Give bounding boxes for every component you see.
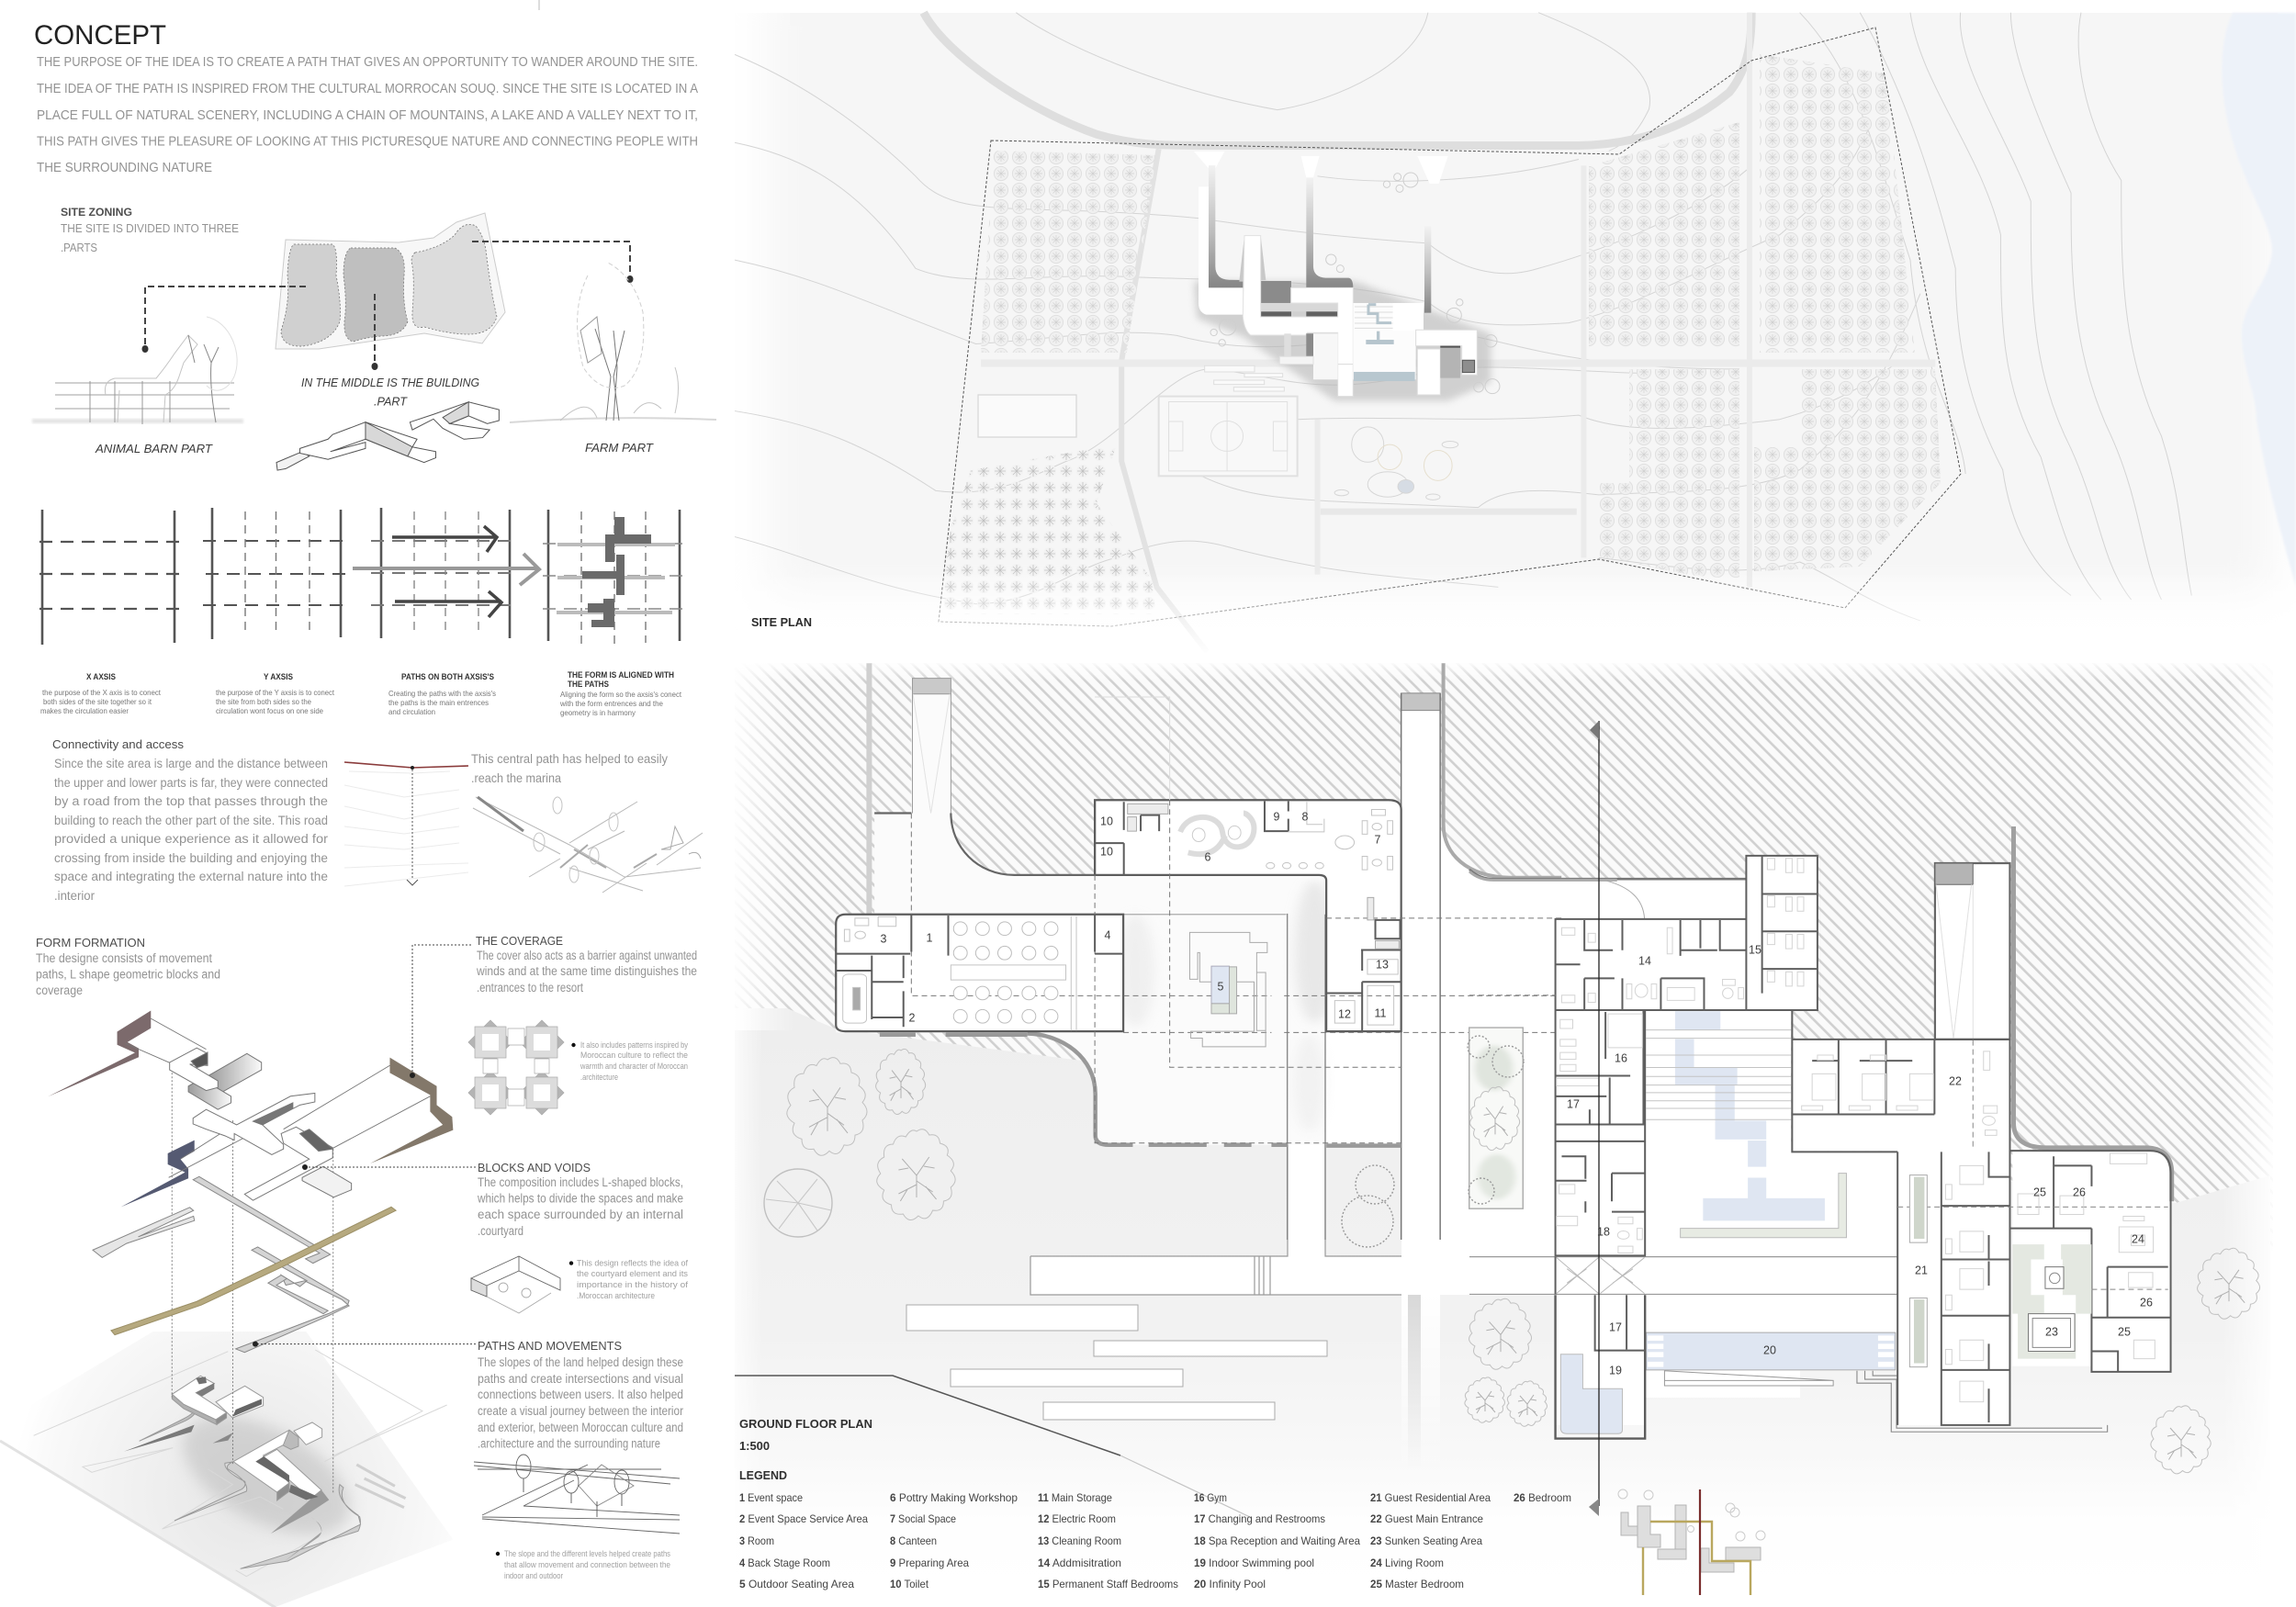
- panel: site zoning: [32, 206, 716, 470]
- paths text: The slopes of the land helped design these: [478, 1355, 683, 1369]
- axis descriptions: circulation wont focus on one side: [216, 706, 323, 715]
- zoning text: THE SITE IS DIVIDED INTO THREE: [61, 222, 239, 235]
- axis captions: [86, 670, 674, 689]
- courtyard note: .Moroccan architecture: [577, 1291, 655, 1301]
- path perspective sketch: [474, 1455, 680, 1534]
- coverage note: It also includes patterns inspired by: [580, 1040, 688, 1051]
- diagram: y axis: [203, 508, 347, 639]
- axonometric base: ground floor massing: [0, 1332, 453, 1607]
- blocks text: .courtyard: [478, 1224, 523, 1238]
- coverage text: [476, 949, 697, 995]
- coverage text: .entrances to the resort: [477, 981, 583, 995]
- axis descriptions: Aligning the form so the axsis's conect: [560, 690, 682, 699]
- outdoor seating courtyard: [1189, 932, 1267, 1047]
- room numbers: 20: [1763, 1343, 1776, 1356]
- legend: 14 Addmisitration: [1038, 1556, 1121, 1569]
- coverage note: warmth and character of Moroccan: [580, 1062, 688, 1072]
- exploded axonometric diagram: [48, 1010, 453, 1494]
- barn rectangle: [978, 395, 1076, 437]
- room numbers: 5: [1218, 980, 1224, 993]
- garden planter: [1469, 1028, 1523, 1208]
- pale floating slabs: [93, 1208, 195, 1257]
- legend: 22 Guest Main Entrance: [1370, 1512, 1483, 1525]
- legend: 5 Outdoor Seating Area: [739, 1578, 854, 1590]
- form formation heading: FORM FORMATION: [36, 936, 145, 950]
- blocks text: [477, 1175, 683, 1238]
- room numbers: 10: [1100, 815, 1113, 827]
- dashed grid continuation: [1469, 995, 2168, 1289]
- axis descriptions: geometry is in harmony: [560, 708, 636, 717]
- building roof plan with shadows: [1194, 152, 1500, 401]
- khaki coverage wall: [370, 1058, 453, 1163]
- event hall tables: [953, 922, 1058, 1023]
- connectivity paragraph: provided a unique experience as it allowed for: [54, 832, 329, 846]
- gray movement paths: [193, 1176, 349, 1353]
- room numbers: 7: [1375, 833, 1381, 846]
- axis descriptions: and circulation: [388, 707, 435, 716]
- heading: ground floor plan: [739, 1417, 872, 1453]
- legend: 8 Canteen: [890, 1534, 937, 1547]
- axis descriptions: [40, 688, 682, 717]
- paths text: and exterior, between Moroccan culture and: [478, 1421, 683, 1434]
- leader dots: [141, 275, 634, 370]
- label: building part: .PART: [374, 395, 408, 408]
- room numbers: [881, 810, 2153, 1377]
- paths note: that allow movement and connection between the: [504, 1560, 670, 1570]
- room numbers: 10: [1100, 845, 1113, 858]
- concept paragraph: THE PURPOSE OF THE IDEA IS TO CREATE A PATH THAT GIVES AN OPPORTUNITY TO WANDER AROUND THE SITE.: [37, 55, 698, 70]
- room numbers: 24: [2132, 1232, 2144, 1245]
- heading: paths and movements: PATHS AND MOVEMENTS: [478, 1339, 622, 1353]
- legend: 12 Electric Room: [1038, 1512, 1116, 1525]
- connectivity heading: Connectivity and access: [52, 737, 185, 751]
- golden path: [111, 1207, 396, 1335]
- axis descriptions: both sides of the site together so it: [43, 697, 152, 706]
- central path caption: This central path has helped to easily: [471, 752, 668, 766]
- label: building part: IN THE MIDDLE IS THE BUILDING: [301, 376, 479, 389]
- axis descriptions: the site from both sides so the: [216, 697, 311, 706]
- zoning text: [61, 222, 239, 254]
- legend: 6 Pottry Making Workshop: [890, 1491, 1018, 1504]
- connectivity paragraph: crossing from inside the building and enjoying the: [54, 851, 328, 865]
- concept paragraph: THE IDEA OF THE PATH IS INSPIRED FROM THE CULTURAL MORROCAN SOUQ. SINCE THE SITE IS LOCATED IN A: [37, 82, 698, 96]
- paths text: .architecture and the surrounding nature: [478, 1436, 660, 1451]
- room numbers: 25: [2033, 1186, 2046, 1198]
- room numbers: 17: [1609, 1320, 1622, 1333]
- legend: 23 Sunken Seating Area: [1370, 1534, 1482, 1547]
- concept paragraph: PLACE FULL OF NATURAL SCENERY, INCLUDING A CHAIN OF MOUNTAINS, A LAKE AND A VALLEY NEXT TO IT,: [37, 108, 698, 123]
- axis descriptions: the paths is the main entrences: [388, 698, 489, 707]
- panel: ground floor plan: [726, 661, 2282, 1596]
- courtyard note: importance in the history of: [577, 1280, 688, 1290]
- key plan diagram: [1618, 1489, 1765, 1595]
- massing sketch: [276, 402, 499, 470]
- site plan bottom fade: [735, 569, 2296, 657]
- diagram: form aligned with paths: [543, 510, 688, 648]
- concept paragraph: THE SURROUNDING NATURE: [37, 161, 212, 175]
- room numbers: 23: [2045, 1325, 2058, 1338]
- axis captions: Y AXSIS: [264, 672, 293, 681]
- east wing: administration, spa and pools: [1469, 826, 2172, 1439]
- projection lines: [172, 1065, 333, 1494]
- blocks text: The composition includes L-shaped blocks,: [478, 1175, 683, 1189]
- panel: site plan: [735, 0, 2296, 657]
- heading: blocks and voids: BLOCKS AND VOIDS: [478, 1161, 591, 1174]
- form formation text: coverage: [36, 983, 83, 997]
- panel: axis diagrams: [39, 508, 688, 717]
- label: building part: [301, 376, 479, 408]
- textured ground: [735, 1008, 2270, 1593]
- hatch edge fades: [726, 661, 2282, 1596]
- panel: form formation: [0, 934, 697, 1607]
- legend: 10 Toilet: [890, 1578, 929, 1590]
- axis captions: X AXSIS: [86, 672, 116, 681]
- tree orchard grids: [940, 54, 1941, 614]
- room numbers: 4: [1105, 928, 1111, 941]
- courtyard note: [569, 1258, 688, 1301]
- guest corridor planters: [1909, 1175, 1927, 1367]
- contour lines: [735, 13, 2191, 621]
- sketch: farm tree: [510, 262, 716, 422]
- trees on ground: [764, 1036, 2260, 1474]
- legend: 2 Event Space Service Area: [739, 1512, 868, 1525]
- connectivity paragraph: by a road from the top that passes through the: [54, 794, 328, 808]
- connectivity paragraph: .interior: [54, 889, 95, 903]
- blocks text: which helps to divide the spaces and make: [477, 1192, 683, 1205]
- sketch: animal barn: [32, 317, 243, 424]
- central path caption: [471, 752, 668, 785]
- room numbers: 11: [1375, 1006, 1387, 1019]
- room numbers: 1: [927, 931, 933, 944]
- legend: 16 Gym: [1194, 1491, 1227, 1504]
- room numbers: 16: [1615, 1051, 1627, 1064]
- zoning leaders: [145, 242, 630, 363]
- walls: [1556, 856, 2171, 1425]
- courtyard note: the courtyard element and its: [577, 1269, 688, 1279]
- courtyard note: This design reflects the idea of: [577, 1258, 688, 1269]
- legend: 21 Guest Residential Area: [1370, 1491, 1491, 1504]
- room numbers: 21: [1915, 1264, 1928, 1276]
- paths text: paths and create intersections and visual: [478, 1372, 683, 1386]
- football pitch: [1159, 397, 1298, 476]
- pottery workshop spiral benches: [1180, 814, 1254, 854]
- legend: 20 Infinity Pool: [1194, 1578, 1266, 1590]
- paths note: indoor and outdoor: [504, 1571, 563, 1581]
- zoning map: [276, 213, 505, 349]
- site plan background wash: [790, 13, 2243, 568]
- heading: ground floor plan: 1:500: [739, 1439, 770, 1453]
- leader: coverage: [410, 945, 471, 1078]
- coverage note: Moroccan culture to reflect the: [580, 1051, 688, 1061]
- zoning text: .PARTS: [61, 242, 97, 254]
- room numbers: 26: [2073, 1186, 2086, 1198]
- section line and arrows: [1589, 721, 1599, 1516]
- navy coverage wall: [121, 1141, 195, 1207]
- diagram: x axis: [39, 510, 180, 645]
- legend: 25 Master Bedroom: [1370, 1578, 1464, 1590]
- central path caption: .reach the marina: [471, 771, 561, 785]
- coverage slab lines: [126, 1018, 430, 1177]
- coverage note: .architecture: [580, 1073, 618, 1083]
- connectivity paragraph: the upper and lower parts is far, they were connected: [54, 776, 328, 790]
- furniture linework: [1557, 859, 2155, 1402]
- room numbers: 19: [1609, 1364, 1622, 1377]
- paths note: The slope and the different levels helped create paths: [504, 1549, 670, 1559]
- form formation text: paths, L shape geometric blocks and: [36, 968, 220, 981]
- coverage text: winds and at the same time distinguishes the: [476, 964, 697, 978]
- label: animal barn part: ANIMAL BARN PART: [95, 443, 213, 455]
- legend: 11 Main Storage: [1038, 1491, 1112, 1504]
- room numbers: 2: [909, 1011, 916, 1024]
- room numbers: 26: [2140, 1296, 2153, 1309]
- site edge line: [735, 1376, 1252, 1518]
- panel: connectivity and access: [52, 737, 703, 903]
- zoning heading: SITE ZONING: [61, 206, 132, 219]
- moroccan tile pattern: [468, 1020, 564, 1115]
- room numbers: 9: [1274, 810, 1280, 823]
- axis descriptions: with the form entrences and the: [559, 699, 663, 708]
- legend: [739, 1468, 1571, 1590]
- label: farm part: FARM PART: [585, 442, 654, 455]
- heading: the coverage: THE COVERAGE: [476, 934, 563, 948]
- room numbers: 14: [1638, 954, 1651, 967]
- form formation text: [36, 951, 220, 997]
- room numbers: 15: [1749, 943, 1761, 956]
- landscaped garden blobs: [1334, 427, 1458, 500]
- room numbers: 17: [1567, 1097, 1580, 1110]
- coverage note: [571, 1040, 688, 1083]
- connectivity paragraph: Since the site area is large and the distance between: [54, 757, 328, 770]
- legend: LEGEND: [739, 1468, 787, 1482]
- coverage text: The cover also acts as a barrier against unwanted: [477, 949, 697, 962]
- concept paragraph: THIS PATH GIVES THE PLEASURE OF LOOKING AT THIS PICTURESQUE NATURE AND CONNECTING PEOPLE WITH: [37, 134, 698, 149]
- panel: concept: [34, 0, 698, 175]
- west wing: event hall and workshop: [836, 663, 1561, 1240]
- room numbers: 12: [1338, 1007, 1351, 1020]
- legend: 4 Back Stage Room: [739, 1556, 830, 1569]
- legend: 15 Permanent Staff Bedrooms: [1038, 1578, 1178, 1590]
- heading: ground floor plan: GROUND FLOOR PLAN: [739, 1417, 872, 1431]
- leader: paths: [253, 1342, 476, 1347]
- axis descriptions: the purpose of the X axis is to conect: [42, 688, 162, 697]
- legend: 18 Spa Reception and Waiting Area: [1194, 1534, 1360, 1547]
- site boundary: [939, 28, 1961, 626]
- bottom terrace bars: [906, 1305, 1327, 1420]
- brown coverage wall: [48, 1010, 151, 1096]
- heading: site plan: SITE PLAN: [751, 615, 812, 629]
- axis descriptions: the purpose of the Y axsis is to conect: [216, 688, 335, 697]
- axis captions: THE PATHS: [568, 680, 609, 689]
- top tier blocks: [170, 1048, 352, 1200]
- legend: 19 Indoor Swimming pool: [1194, 1556, 1314, 1569]
- room numbers: 25: [2118, 1325, 2131, 1338]
- room numbers: 8: [1302, 810, 1309, 823]
- legend: 26 Bedroom: [1514, 1491, 1571, 1504]
- band edge lines with steps: [1030, 1010, 1401, 1295]
- hatched slope area: [735, 663, 2273, 1251]
- lower road strip fading out: [1401, 1295, 1440, 1478]
- connectivity paragraph: space and integrating the external nature into the: [54, 870, 328, 883]
- blocks text: each space surrounded by an internal: [478, 1208, 683, 1221]
- axis captions: THE FORM IS ALIGNED WITH: [568, 670, 674, 680]
- water steps and reflecting pools: [1675, 1011, 1825, 1220]
- room numbers: 13: [1376, 958, 1389, 971]
- room numbers: 6: [1205, 850, 1211, 863]
- axis descriptions: makes the circulation easier: [40, 706, 129, 715]
- axis captions: PATHS ON BOTH AXSIS'S: [401, 672, 494, 681]
- concept paragraph: [37, 55, 698, 175]
- room numbers: 3: [881, 932, 887, 945]
- section diagram with central path: [344, 762, 468, 886]
- connectivity paragraph: building to reach the other part of the site. This road: [54, 814, 328, 827]
- pavements and roofs: [1030, 693, 1898, 1398]
- paths note: [496, 1549, 670, 1581]
- lake water edge: [2222, 13, 2296, 588]
- paths text: create a visual journey between the interior: [478, 1404, 683, 1418]
- legend: 1 Event space: [739, 1491, 803, 1504]
- paths text: connections between users. It also helped: [478, 1388, 683, 1401]
- room numbers: 18: [1597, 1225, 1610, 1238]
- diagram: paths on both axes: [353, 508, 539, 638]
- legend: 7 Social Space: [890, 1512, 956, 1525]
- connectivity paragraph: [54, 757, 329, 903]
- leader: blocks: [302, 1164, 476, 1170]
- sunken seating court: [2012, 1244, 2091, 1359]
- access roads: [924, 13, 1935, 652]
- marina path sketch: [473, 797, 703, 893]
- room numbers: 22: [1949, 1074, 1962, 1087]
- courtyard sketch: [471, 1256, 560, 1313]
- paths text: [478, 1355, 683, 1451]
- legend: 13 Cleaning Room: [1038, 1534, 1121, 1547]
- infinity pool: [1646, 1332, 1896, 1370]
- legend: 24 Living Room: [1370, 1556, 1444, 1569]
- top tick: [538, 0, 540, 10]
- legend: 17 Changing and Restrooms: [1194, 1512, 1325, 1525]
- axis descriptions: Creating the paths with the axsis's: [388, 689, 496, 698]
- legend: 9 Preparing Area: [890, 1556, 969, 1569]
- legend: 3 Room: [739, 1534, 774, 1547]
- title: CONCEPT: [34, 20, 166, 51]
- dashed structure grid: [911, 800, 1561, 1143]
- form formation text: The designe consists of movement: [36, 951, 212, 965]
- indoor swimming pool: [1560, 1354, 1622, 1433]
